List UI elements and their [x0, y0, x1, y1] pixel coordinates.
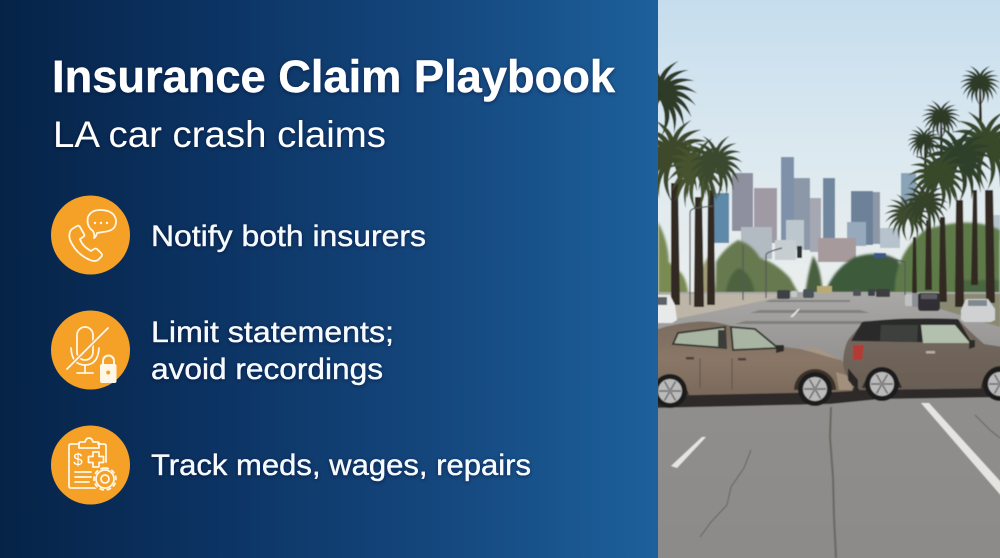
palm crowns [658, 60, 1000, 241]
parked dark SUV [918, 293, 940, 311]
icon: phone with chat bubble [51, 196, 130, 274]
street lights and signals [690, 206, 905, 305]
distant cars [777, 286, 920, 307]
step 3: track costs [51, 426, 531, 504]
mini car [843, 318, 1000, 401]
midground trees [658, 222, 1000, 300]
label: Track meds, wages, repairs [151, 449, 531, 482]
pavement base [640, 292, 1000, 558]
left gradient panel [0, 0, 658, 558]
label: avoid recordings [151, 353, 383, 386]
shadow under cars [650, 386, 1000, 408]
road shadow bands [735, 300, 880, 324]
lane markings [671, 309, 1000, 506]
step 2: limit statements [51, 310, 394, 390]
pavement cracks [700, 407, 1000, 558]
parked white car right [961, 299, 995, 322]
step 1: notify both insurers [51, 196, 426, 274]
palm trunks [671, 83, 995, 307]
icon: muted microphone with lock [51, 310, 130, 390]
sidewalk left [658, 294, 778, 319]
sedan car [650, 321, 853, 408]
title: Insurance Claim Playbook [52, 51, 616, 102]
parked white car left [658, 294, 678, 324]
sky [658, 0, 1000, 293]
label: Limit statements; [151, 316, 394, 349]
label [151, 316, 394, 386]
icon: clipboard with gear: $ [73, 450, 83, 469]
label: Notify both insurers [151, 220, 426, 253]
subtitle: LA car crash claims [53, 114, 386, 155]
downtown skyline [713, 157, 1000, 262]
photo: LA street with two crashed cars [623, 0, 1000, 558]
icon: clipboard with gear [51, 426, 130, 504]
